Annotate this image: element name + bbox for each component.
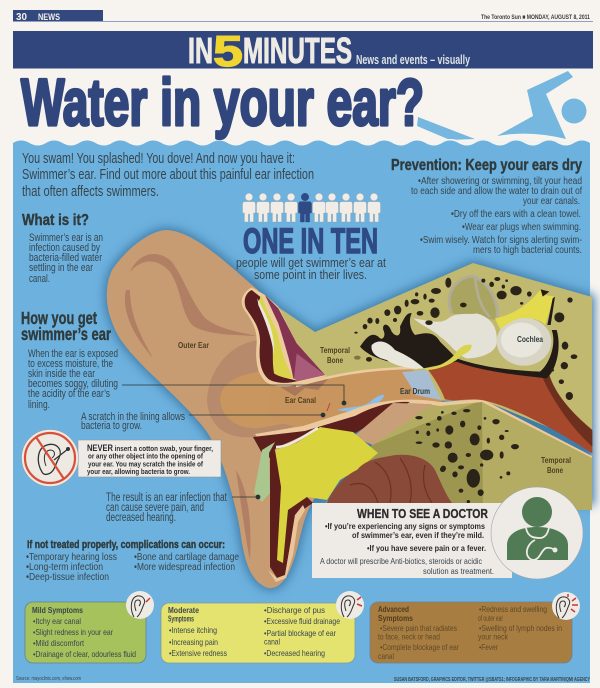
panel: when to see a doctor: solution as treatment. (423, 566, 494, 576)
panel: moderate symptoms (161, 591, 364, 663)
panel: advanced symptoms: of outer ear (478, 613, 503, 623)
callout: never: your ear, allowing bacteria to grow. (87, 467, 190, 476)
intro text: You swam! You splashed! You dove! And now you have it: (22, 150, 295, 167)
complications list: •More widespread infection (134, 561, 235, 573)
panel: what is it: Swimmer’s ear is an (29, 232, 103, 244)
result text: can cause severe pain, and (106, 502, 204, 514)
panel: when to see a doctor: •If you’re experiencing any signs or symptoms (325, 521, 485, 531)
panel: how you get swimmer's ear: to excess moisture, the (28, 358, 113, 370)
panel: mild symptoms (25, 591, 154, 663)
canal funnel (207, 340, 300, 437)
dark tissue strip (270, 450, 313, 578)
one in ten statistic: people will get swimmer’s ear at (236, 256, 386, 270)
credits: Source: mayoclinic.com, ehow.com (16, 676, 81, 682)
banner: In 5 Minutes: 5 (213, 27, 243, 76)
panel: moderate symptoms: •Intense itching (169, 625, 217, 635)
panel: when to see a doctor: •If you have severe pain or a fever. (367, 543, 486, 553)
panel: mild symptoms: •Slight redness in your ear (33, 627, 113, 637)
complications list: If not treated properly, complications can occur: (27, 539, 225, 551)
panel: when to see a doctor (312, 487, 583, 579)
lower bone pores (440, 467, 510, 503)
ear labels (178, 335, 571, 475)
panel: how you get swimmer's ear: the acidity of the ear’s (28, 388, 110, 400)
panel: how you get swimmer's ear: bacteria to grow. (81, 420, 142, 432)
one in ten statistic (236, 193, 386, 282)
panel: what is it: settling in the ear (29, 262, 93, 274)
panel: what is it: canal. (29, 273, 50, 285)
panel: how you get swimmer's ear (21, 308, 185, 432)
auditory nerve (495, 290, 555, 329)
outer ear flesh (107, 230, 330, 588)
icon: ear, mild (126, 591, 154, 619)
panel: advanced symptoms: canal (378, 651, 394, 661)
inner ear, drawn in local coordinates (354, 276, 592, 471)
panel: advanced symptoms: your neck (478, 632, 509, 642)
ear labels: Temporal (541, 456, 571, 465)
icon: ear, moderate (336, 591, 364, 619)
panel: when to see a doctor: A doctor will prescribe Anti-biotics, steroids or acidic (320, 556, 483, 566)
result text: decreased hearing. (106, 512, 176, 524)
panel: what is it: infection caused by (29, 242, 100, 254)
leader lines (122, 385, 346, 499)
callout: never: or any other object into the opening of (88, 452, 203, 460)
callout: never (22, 430, 221, 486)
vestibule (413, 313, 497, 358)
pictogram: ten people (242, 193, 380, 222)
panel: how you get swimmer's ear: becomes soggy, diluting (28, 378, 118, 390)
panel: moderate symptoms: canal (264, 636, 280, 646)
bone pores (354, 277, 577, 471)
panel: mild symptoms: •Mild discomfort (33, 638, 85, 648)
ear shadow on water (107, 230, 592, 588)
swimmer icon (417, 71, 586, 140)
panel: advanced symptoms (370, 592, 580, 663)
panel: advanced symptoms: •Redness and swelling (479, 604, 547, 614)
illustration: ear anatomy (107, 230, 592, 588)
upper temporal bone (268, 263, 592, 445)
result text (106, 492, 228, 524)
icon: ear, advanced (552, 592, 580, 620)
cartilage above canal (242, 287, 327, 386)
panel: moderate symptoms: •Excessive fluid drainage (264, 616, 340, 626)
intro text: Swimmer’s ear. Find out more about this painful ear infection (22, 166, 314, 183)
panel: moderate symptoms: •Discharge of pus (264, 605, 325, 615)
result text: The result is an ear infection that (106, 492, 228, 504)
panel: advanced symptoms: •Swelling of lymph nodes in (479, 623, 562, 633)
panel: how you get swimmer's ear: How you get (21, 308, 97, 328)
complications list: •Long-term infection (26, 561, 103, 573)
panel: how you get swimmer's ear: When the ear is exposed (28, 348, 118, 360)
panel: mild symptoms: •Drainage of clear, odourless fluid (33, 649, 136, 659)
lower temporal bone (320, 400, 592, 510)
ear labels: Ear Canal (285, 396, 316, 405)
intro text: that often affects swimmers. (22, 183, 159, 200)
icon: doctor with stethoscope (491, 487, 583, 579)
page header: 30 (16, 12, 27, 23)
ear labels: Ear Drum (400, 387, 430, 396)
fatty tissue (275, 427, 378, 563)
complications list: •Deep-tissue infection (26, 571, 109, 583)
page header: NEWS (38, 12, 60, 23)
icon: no cotton swab in ear (22, 430, 78, 486)
water in canal (337, 395, 384, 411)
complications list: •Temporary hearing loss (26, 551, 117, 563)
panel: mild symptoms: Mild Symptoms (32, 605, 83, 615)
complications list (26, 539, 239, 583)
banner: In 5 Minutes: News and events – visually (356, 53, 470, 67)
panel: advanced symptoms: Advanced (378, 604, 409, 614)
ear labels: Bone (547, 466, 563, 475)
red tissue (428, 360, 592, 453)
panel: advanced symptoms: •Fever (479, 642, 498, 652)
panel: when to see a doctor: of swimmer’s ear, even if they’re mild. (352, 530, 484, 540)
panel: what is it: What is it? (22, 212, 89, 229)
semicircular canals (449, 276, 497, 320)
panel: how you get swimmer's ear: skin inside the ear (28, 368, 95, 380)
panel: moderate symptoms: •Extensive redness (169, 648, 227, 658)
panel: advanced symptoms: •Severe pain that radiates (380, 623, 457, 633)
ear labels: Outer Ear (178, 341, 209, 350)
complications list: •Bone and cartilage damage (134, 551, 239, 563)
one in ten statistic: ONE IN TEN (243, 222, 378, 261)
panel: moderate symptoms: Symptoms (168, 614, 194, 624)
credits (16, 676, 590, 683)
parotid muscle (327, 455, 452, 503)
panel: moderate symptoms: •Decreased hearing (264, 648, 325, 658)
canal floor (253, 399, 592, 458)
banner: In 5 Minutes: IN (188, 30, 213, 71)
ossicle (423, 345, 472, 370)
panel: moderate symptoms: •Increasing pain (169, 637, 218, 647)
helix fold shading (125, 254, 257, 560)
panel: how you get swimmer's ear: swimmer’s ear (21, 324, 111, 344)
panel: what is it (22, 212, 103, 285)
callout: never: your ear. You may scratch the inside of (88, 460, 203, 468)
panel: advanced symptoms: to face, neck or head (378, 632, 440, 642)
ear labels: Bone (327, 356, 343, 365)
canal roof band (296, 368, 418, 386)
ear labels: Temporal (320, 346, 350, 355)
ear drum (402, 370, 441, 400)
scratch (327, 403, 330, 411)
air cavity (371, 341, 424, 369)
white highlight (276, 428, 318, 447)
cochlea (497, 318, 551, 366)
callout: never: NEVER insert a cotton swab, your finger, (87, 443, 213, 453)
panel: prevention: your ear canals. (523, 195, 580, 207)
panel: moderate symptoms: •Partial blockage of ear (264, 628, 336, 638)
panel: mild symptoms: •Itchy ear canal (33, 616, 81, 626)
ear canal (270, 369, 442, 428)
page header (13, 10, 593, 23)
panel: how you get swimmer's ear: A scratch in the lining allows (81, 411, 185, 423)
ear labels: Cochlea (517, 335, 543, 344)
infection pus (254, 442, 275, 502)
panel: when to see a doctor: WHEN TO SEE A DOCTOR (357, 507, 488, 521)
one in ten statistic: some point in their lives. (254, 268, 367, 282)
panel: moderate symptoms: Moderate (168, 605, 199, 615)
banner: In 5 Minutes: MINUTES (243, 30, 352, 71)
panel: advanced symptoms: Symptoms (378, 613, 413, 623)
panel: what is it: bacteria-filled water (29, 252, 102, 264)
banner: In 5 Minutes (13, 27, 593, 76)
panel: advanced symptoms: •Complete blockage of ear (380, 642, 459, 652)
black cavity (360, 313, 559, 378)
title: Water in your ear? (21, 65, 424, 139)
intro text (22, 150, 314, 200)
lower bone darker facet (320, 400, 483, 510)
panel: how you get swimmer's ear: lining. (28, 399, 50, 411)
panel: prevention (391, 157, 582, 256)
blue water background (13, 140, 590, 683)
